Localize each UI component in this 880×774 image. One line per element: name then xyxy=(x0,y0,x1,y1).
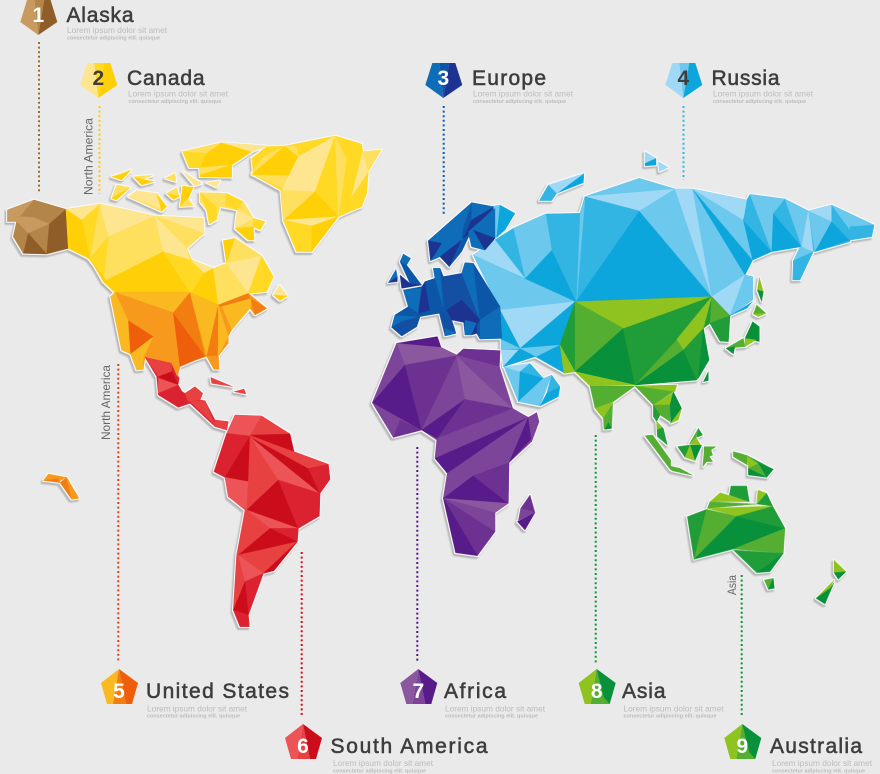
island: Tasmania xyxy=(764,578,774,589)
badge 1: Alaska xyxy=(20,0,57,35)
label 1: Alaska xyxy=(66,4,168,42)
label 5: United States: Lorem ipsum dolor sit amet xyxy=(147,705,248,714)
region: Europe xyxy=(388,254,502,339)
region: Arctic islands xyxy=(112,143,267,240)
region: Asia xyxy=(560,297,730,445)
dotted line: South America xyxy=(301,552,303,716)
label 2: Canada: consectetur adipiscing elit. quisque xyxy=(128,99,222,105)
region: Japan xyxy=(726,277,766,354)
label 6: South America xyxy=(330,735,488,774)
label 5: United States xyxy=(146,680,289,720)
region: Finland xyxy=(493,205,515,238)
dotted line: Russia xyxy=(682,106,684,180)
island: Great Britain xyxy=(400,254,422,288)
label 3: Europe: consectetur adipiscing elit. quisque xyxy=(473,99,566,105)
badge 2: Canada: 2 xyxy=(92,67,104,90)
dotted line: Africa xyxy=(416,447,418,663)
island: Novaya Zemlya xyxy=(539,173,584,201)
badge 8: Asia: 8 xyxy=(591,680,603,703)
badge 7: Africa xyxy=(400,669,437,704)
label 8: Asia: Lorem ipsum dolor sit amet xyxy=(624,705,724,714)
label 9: Australia: Lorem ipsum dolor sit amet xyxy=(772,759,873,768)
label 9: Australia xyxy=(770,735,873,774)
region: Australia xyxy=(687,486,846,604)
region: United States xyxy=(111,285,287,377)
label 1: Alaska: consectetur adipiscing elit. quisque xyxy=(67,36,160,42)
region: Central America xyxy=(145,357,246,430)
side label: North America upper: North America xyxy=(82,118,96,195)
badge 7: Africa: 7 xyxy=(412,680,424,703)
badge 5: United States: 5 xyxy=(113,680,125,703)
badge 3: Europe: 3 xyxy=(437,67,449,90)
label 7: Africa: Lorem ipsum dolor sit amet xyxy=(445,705,546,714)
side label: North America lower: North America xyxy=(99,365,113,440)
badge 3: Europe xyxy=(425,63,462,98)
dotted line: United States xyxy=(117,364,119,663)
island: Ireland xyxy=(388,269,397,283)
label 2: Canada: Lorem ipsum dolor sit amet xyxy=(128,90,229,99)
dotted line: Europe xyxy=(443,106,445,215)
badge 4: Russia xyxy=(665,63,702,98)
label 4: Russia: Lorem ipsum dolor sit amet xyxy=(713,90,814,99)
dotted line: Canada xyxy=(98,106,100,194)
label 3: Europe xyxy=(472,67,574,105)
badge 9: Australia: 9 xyxy=(736,735,748,758)
label 7: Africa: consectetur adipiscing elit. quisque xyxy=(445,714,538,720)
region: Africa xyxy=(372,337,539,556)
label 5: United States: United States xyxy=(146,680,289,703)
dotted line: Australia xyxy=(741,575,743,716)
region: South America xyxy=(214,415,330,627)
badge 8: Asia xyxy=(579,669,616,704)
label 1: Alaska: Alaska xyxy=(66,4,134,27)
label 9: Australia: Australia xyxy=(770,735,862,758)
world map xyxy=(7,136,874,627)
label 5: United States: consectetur adipiscing elit. quisque xyxy=(147,714,240,720)
region: Arabia xyxy=(504,363,560,406)
label 4: Russia: consectetur adipiscing elit. quisque xyxy=(713,99,806,105)
badge 9: Australia xyxy=(724,724,761,759)
label 7: Africa: Africa xyxy=(444,680,506,703)
region: Canada xyxy=(66,143,273,305)
label 8: Asia: consectetur adipiscing elit. quisque xyxy=(624,714,716,720)
label 7: Africa xyxy=(444,680,546,720)
badge 6: South America: 6 xyxy=(297,735,309,758)
island: Hainan xyxy=(703,372,708,382)
dotted line: Asia xyxy=(595,435,597,663)
region: Hawaii island xyxy=(43,474,79,499)
label 6: South America: South America xyxy=(330,735,488,758)
label 4: Russia: Russia xyxy=(712,67,780,90)
badge 1: Alaska: 1 xyxy=(32,4,44,27)
region: Indonesia xyxy=(645,428,773,477)
badge 2: Canada xyxy=(80,63,117,98)
region: Alaska xyxy=(7,200,68,254)
label 1: Alaska: Lorem ipsum dolor sit amet xyxy=(67,26,168,35)
label 8: Asia xyxy=(622,680,724,720)
label 3: Europe: Europe xyxy=(472,67,546,90)
label 3: Europe: Lorem ipsum dolor sit amet xyxy=(473,90,574,99)
region: Greenland xyxy=(252,136,381,252)
badge 5: United States xyxy=(101,669,138,704)
island: New Zealand xyxy=(816,560,846,604)
side label: Asia: Asia xyxy=(725,575,739,595)
region: India xyxy=(575,372,635,429)
region: Scandinavia xyxy=(428,203,495,267)
island: Newfoundland xyxy=(273,285,287,301)
badge 6: South America xyxy=(285,724,322,759)
label 2: Canada: Canada xyxy=(127,67,205,90)
island: Franz Josef Land xyxy=(645,152,668,172)
label 8: Asia: Asia xyxy=(622,680,666,703)
badge 4: Russia: 4 xyxy=(677,67,689,90)
label 2: Canada xyxy=(127,67,229,105)
dotted line: Alaska xyxy=(38,42,40,192)
label 4: Russia xyxy=(712,67,814,105)
label 6: South America: Lorem ipsum dolor sit amet xyxy=(333,759,434,768)
region: Indochina xyxy=(635,385,682,445)
island: Madagascar xyxy=(517,495,535,530)
region: Russia xyxy=(473,152,874,373)
